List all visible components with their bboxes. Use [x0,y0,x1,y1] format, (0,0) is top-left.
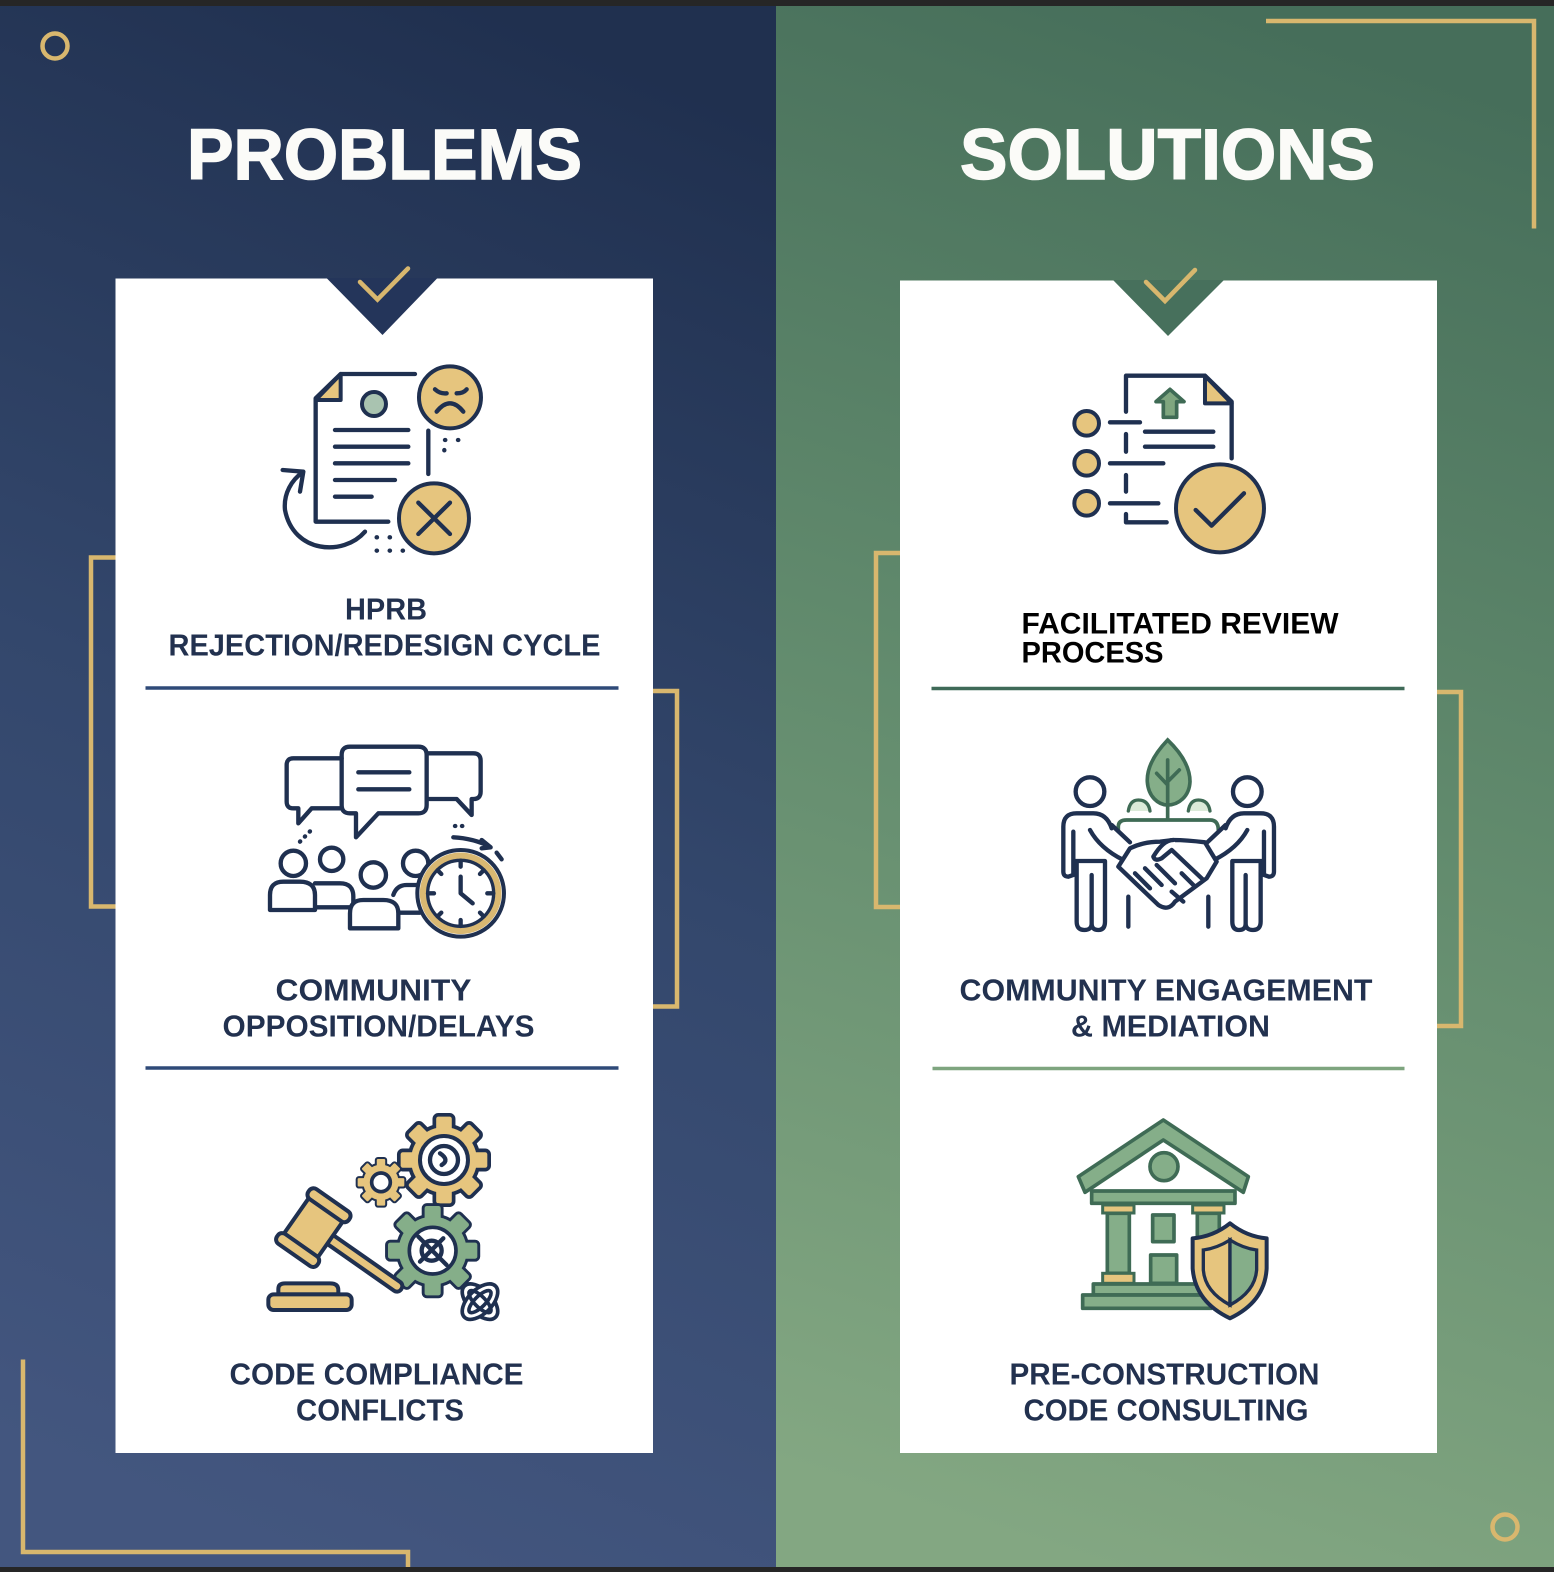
panel: solutions card [900,270,1437,1453]
label: community engagement: & MEDIATION [1071,1008,1270,1044]
label: community engagement: COMMUNITY ENGAGEMENT [960,972,1373,1008]
label: pre-construction consulting [1010,1356,1320,1428]
divider: problems 2 [146,1066,618,1070]
panel: problems card [116,268,653,1453]
decorative gold frames: solutions side [876,21,1534,1540]
icon: review checklist [1074,376,1264,552]
decorative gold frames: problems side [23,34,677,1567]
label: pre-construction consulting: CODE CONSULTING [1024,1392,1308,1428]
label: code compliance: CODE COMPLIANCE [230,1356,524,1392]
label: rejection cycle: HPRB [345,592,427,626]
label: facilitated review: FACILITATED REVIEW [1022,608,1339,640]
label: facilitated review [1022,608,1339,670]
label: code compliance [230,1356,524,1428]
label: community opposition [222,972,534,1044]
heading: solutions: SOLUTIONS [960,116,1375,195]
divider: problems 1 [146,686,618,690]
label: pre-construction consulting: PRE-CONSTRUCTION [1010,1356,1320,1392]
icon: rejected document [283,366,481,553]
panel: problems background [0,6,776,1567]
icon: civic building and shield [1078,1120,1267,1318]
label: code compliance: CONFLICTS [296,1392,464,1428]
card notch with check [326,268,438,335]
label: facilitated review: PROCESS [1022,636,1164,670]
divider: solutions 1 [932,687,1404,690]
divider: solutions 2 [932,1067,1404,1070]
panel: solutions background [776,6,1554,1567]
label: community engagement [960,972,1373,1044]
icon: handshake and plant [1063,740,1274,930]
label: community opposition: COMMUNITY [276,972,472,1008]
label: community opposition: OPPOSITION/DELAYS [222,1008,534,1044]
icon: gavel and gears [268,1117,504,1326]
label: rejection cycle: REJECTION/REDESIGN CYCLE [168,628,600,662]
card notch with check [1113,270,1224,336]
heading: problems: PROBLEMS [187,116,582,195]
label: rejection cycle [168,592,600,662]
icon: community discussion and clock [270,747,504,937]
